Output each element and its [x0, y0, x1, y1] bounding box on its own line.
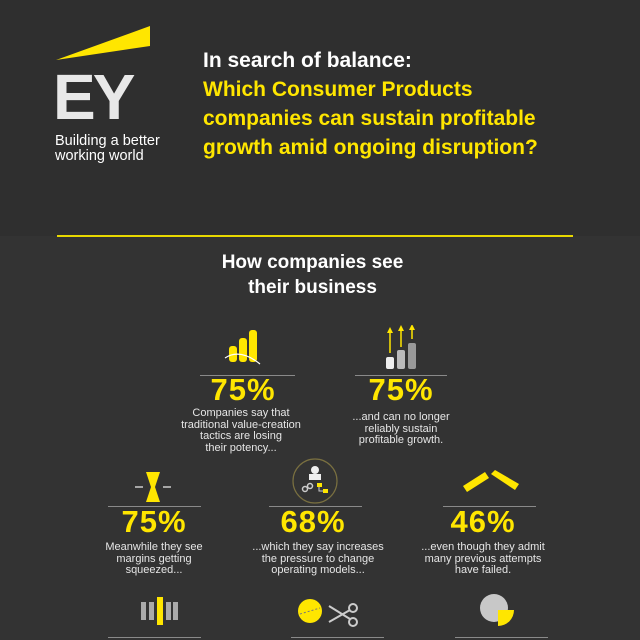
stat 3: 75% — [121, 504, 187, 539]
stat 1: 75% — [210, 372, 276, 407]
title — [203, 49, 538, 159]
stat 4: 68% — [280, 504, 346, 539]
icon: pie — [480, 594, 514, 626]
title: companies can sustain profitable — [203, 107, 536, 130]
tagline: Building a better — [55, 133, 160, 149]
icon: squeeze — [135, 472, 171, 502]
icon: operating model — [292, 458, 338, 504]
row 3 icons — [108, 594, 548, 638]
stat 5: have failed. — [455, 564, 511, 576]
icon: bars — [141, 597, 178, 625]
logo beam — [56, 26, 150, 60]
stat 3: squeezed... — [126, 564, 182, 576]
header background — [0, 0, 640, 236]
stat 3: margins getting — [116, 552, 192, 564]
stat 4: the pressure to change — [262, 552, 374, 564]
stat 5: many previous attempts — [425, 552, 541, 564]
stat 5: 46% — [450, 504, 516, 539]
stat 3: Meanwhile they see — [105, 541, 203, 553]
stat 5 — [421, 470, 545, 576]
icon: coin and scissors — [298, 599, 358, 627]
stat 2: reliably sustain — [365, 422, 437, 434]
tagline: working world — [55, 148, 144, 164]
tagline — [55, 133, 160, 164]
stat 2: ...and can no longer — [352, 411, 450, 423]
title: In search of balance: — [203, 49, 412, 72]
stat 4: ...which they say increases — [252, 541, 384, 553]
title: growth amid ongoing disruption? — [203, 136, 538, 159]
yellow divider — [57, 235, 573, 237]
logo letters: EY — [53, 61, 132, 133]
stat 1 — [181, 330, 301, 454]
icon: bar chart — [224, 330, 260, 364]
stat 2: profitable growth. — [359, 434, 443, 446]
stat 4: operating models... — [271, 564, 365, 576]
stat 2 — [352, 325, 450, 446]
stat 1: traditional value-creation — [181, 418, 301, 430]
stat 3 — [105, 472, 203, 576]
section heading — [222, 252, 403, 298]
logo — [53, 26, 160, 164]
icon: broken arrow — [463, 470, 519, 492]
stat 1: Companies say that — [192, 407, 290, 419]
section heading: How companies see — [222, 252, 403, 273]
section heading: their business — [248, 277, 377, 298]
stat 1: their potency... — [205, 442, 277, 454]
stat 5: ...even though they admit — [421, 541, 545, 553]
stat 4 — [252, 458, 384, 576]
icon: rising bars — [386, 325, 416, 369]
stat 2: 75% — [368, 372, 434, 407]
stat 1: tactics are losing — [200, 430, 282, 442]
title: Which Consumer Products — [203, 78, 473, 101]
